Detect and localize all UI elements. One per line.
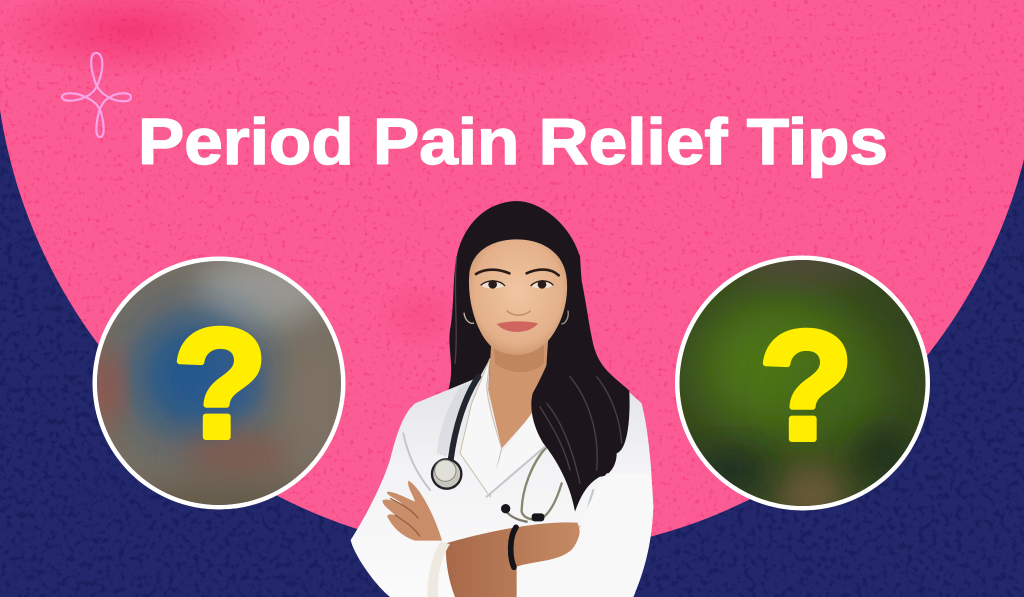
question mark: left: ?	[173, 297, 267, 470]
shoulder shade	[437, 380, 480, 457]
right mystery circle	[675, 250, 930, 525]
coat sleeve right	[517, 473, 653, 597]
left mystery circle	[90, 252, 350, 525]
doctor illustration	[351, 201, 653, 597]
face	[469, 239, 567, 355]
title: Period Pain Relief Tips	[138, 105, 888, 178]
facial features	[464, 270, 559, 332]
blurred photo: left	[97, 261, 341, 505]
collar	[460, 358, 502, 497]
icon: decorative sparkle	[62, 53, 131, 137]
neck shadow	[494, 344, 544, 372]
bracelet	[511, 527, 516, 567]
hair back	[448, 201, 587, 390]
white coat	[351, 358, 653, 597]
hair front, falling over coat	[531, 233, 630, 512]
crossed arms	[383, 481, 580, 597]
neck	[488, 337, 548, 448]
earring right	[561, 311, 568, 324]
hair highlights	[455, 257, 622, 483]
question mark: right: ?	[759, 299, 853, 472]
blurred photo: right	[680, 260, 926, 506]
stethoscope	[432, 377, 562, 522]
coat folds	[403, 433, 593, 527]
